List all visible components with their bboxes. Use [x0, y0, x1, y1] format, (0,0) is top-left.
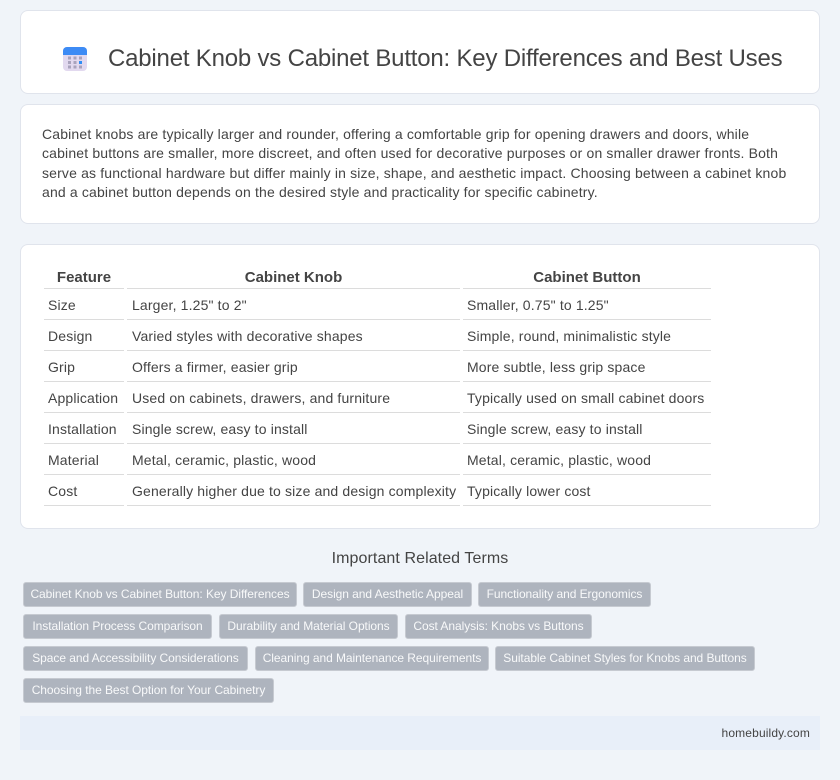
panel: intro text [20, 104, 820, 224]
table rows: Typically lower cost [467, 483, 591, 499]
table header: Feature [57, 269, 111, 286]
table rows: Grip [48, 359, 75, 375]
related term tags: Cleaning and Maintenance Requirements [263, 651, 481, 665]
table rows: Offers a firmer, easier grip [132, 359, 298, 375]
table header: Cabinet Button [533, 269, 641, 286]
table header: Cabinet Knob [245, 269, 342, 286]
related term tags: Installation Process Comparison [32, 619, 203, 633]
related term tags: Cabinet Knob vs Cabinet Button: Key Differences [30, 587, 290, 601]
table rows: Simple, round, minimalistic style [467, 328, 671, 344]
heading: related terms: Important Related Terms [332, 550, 508, 567]
table rows: Generally higher due to size and design complexity [132, 483, 456, 499]
table rows: Size [48, 297, 76, 313]
table rows: Cost [48, 483, 77, 499]
text block: intro: serve as functional hardware but differ mainly in size, shape, and aesthetic impact. Choosing between a cabinet knob [42, 165, 786, 181]
table rows: Application [48, 390, 118, 406]
text block: intro [42, 126, 786, 200]
table rows: Single screw, easy to install [132, 421, 308, 437]
panel: comparison table [20, 244, 820, 529]
related term tags: Space and Accessibility Considerations [32, 651, 239, 665]
related term tags: Functionality and Ergonomics [487, 587, 642, 601]
table rows: Single screw, easy to install [467, 421, 643, 437]
table rows: Larger, 1.25" to 2" [132, 297, 247, 313]
table rows [44, 288, 711, 506]
related term tags: Cost Analysis: Knobs vs Buttons [413, 619, 584, 633]
table rows: Varied styles with decorative shapes [132, 328, 363, 344]
icon: calendar [63, 47, 87, 71]
table rows: Metal, ceramic, plastic, wood [132, 452, 316, 468]
table rows: Material [48, 452, 99, 468]
related term tags [23, 582, 755, 703]
panel: header [20, 10, 820, 94]
text block: intro: Cabinet knobs are typically larger and rounder, offering a comfortable grip for opening drawers and doors, while [42, 126, 749, 142]
table rows: Smaller, 0.75" to 1.25" [467, 297, 609, 313]
text block: intro: and a cabinet button depends on the desired style and practicality for specific cabinetry. [42, 184, 598, 200]
table rows: Metal, ceramic, plastic, wood [467, 452, 651, 468]
related term tags: Durability and Material Options [227, 619, 390, 633]
related term tags: Suitable Cabinet Styles for Knobs and Buttons [503, 651, 747, 665]
footer [20, 716, 820, 750]
table rows: Used on cabinets, drawers, and furniture [132, 390, 390, 406]
table rows: Design [48, 328, 92, 344]
related term tags: Choosing the Best Option for Your Cabinetry [32, 683, 265, 697]
table rows: More subtle, less grip space [467, 359, 646, 375]
table header [57, 269, 641, 286]
table rows: Typically used on small cabinet doors [467, 390, 704, 406]
text block: intro: cabinet buttons are smaller, more discreet, and often used for decorative purposes or on smaller drawer fronts. Both [42, 145, 778, 161]
footer: site name: homebuildy.com [722, 726, 810, 740]
table rows: Installation [48, 421, 117, 437]
related term tags: Design and Aesthetic Appeal [312, 587, 463, 601]
title: Cabinet Knob vs Cabinet Button: Key Differences and Best Uses [108, 45, 782, 72]
